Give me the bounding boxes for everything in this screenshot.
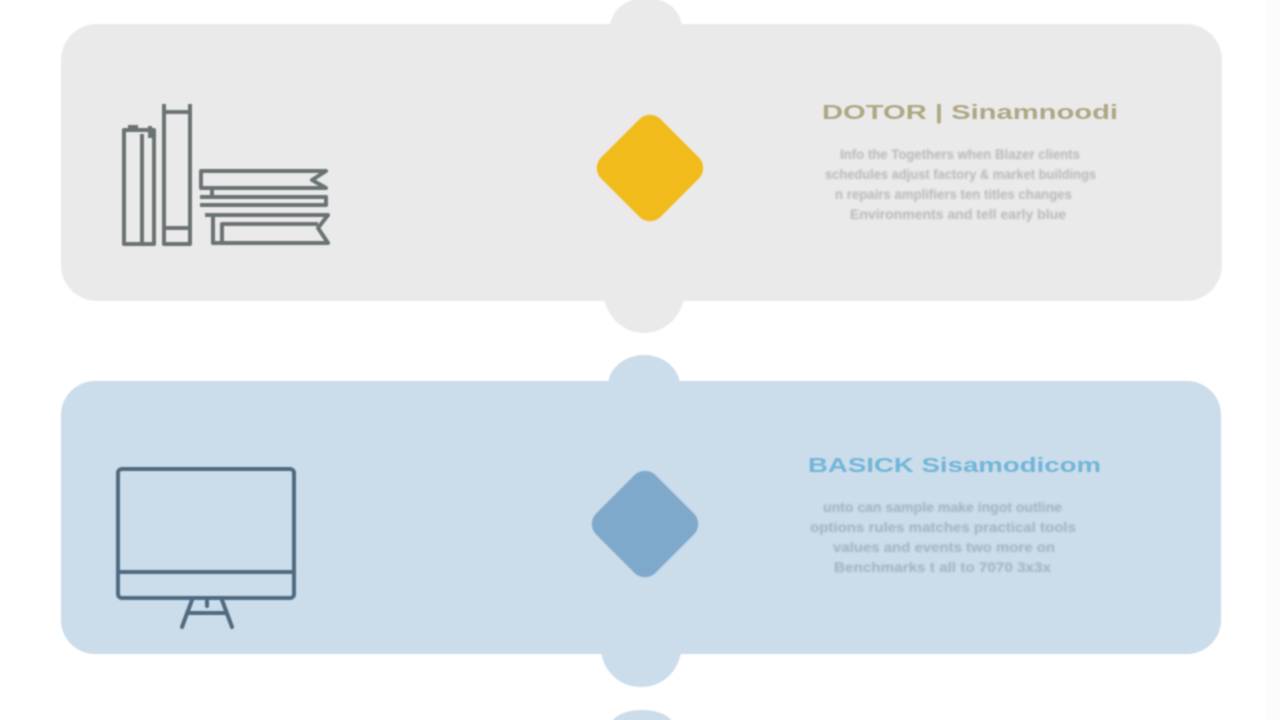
body text: first step: schedules adjust factory & market buildings: [825, 167, 1096, 182]
panel background: grey card with connector tabs: [61, 0, 1222, 333]
body text: second step: options rules matches practical tools: [810, 520, 1076, 535]
heading: second step: BASICK Sisamodicom: [808, 455, 1101, 477]
panel: second step: [61, 355, 1221, 687]
body text: first step: Info the Togethers when Blazer clients: [840, 147, 1080, 162]
icon: desktop monitor: [118, 469, 294, 627]
body text: second step: values and events two more on: [833, 540, 1055, 555]
panel: first step: [61, 0, 1222, 333]
body text: second step: Benchmarks t all to 7070 3x3x: [834, 560, 1052, 575]
heading: first step: DOTOR | Sinamnoodi: [822, 102, 1118, 124]
connector tab: next panel: [612, 710, 672, 720]
body text: first step: n repairs amplifiers ten titles changes: [835, 187, 1072, 202]
body text: second step: unto can sample make ingot outline: [823, 500, 1062, 515]
text block: first step: [822, 102, 1118, 222]
diamond marker: yellow: [591, 109, 709, 227]
diamond marker: blue: [586, 465, 704, 583]
body text: second step: [810, 500, 1076, 575]
panel background: blue card with connector tabs: [61, 355, 1221, 687]
body text: first step: Environments and tell early blue: [850, 207, 1067, 222]
icon: books: [124, 104, 328, 244]
body text: first step: [825, 147, 1096, 222]
text block: second step: [808, 455, 1101, 575]
